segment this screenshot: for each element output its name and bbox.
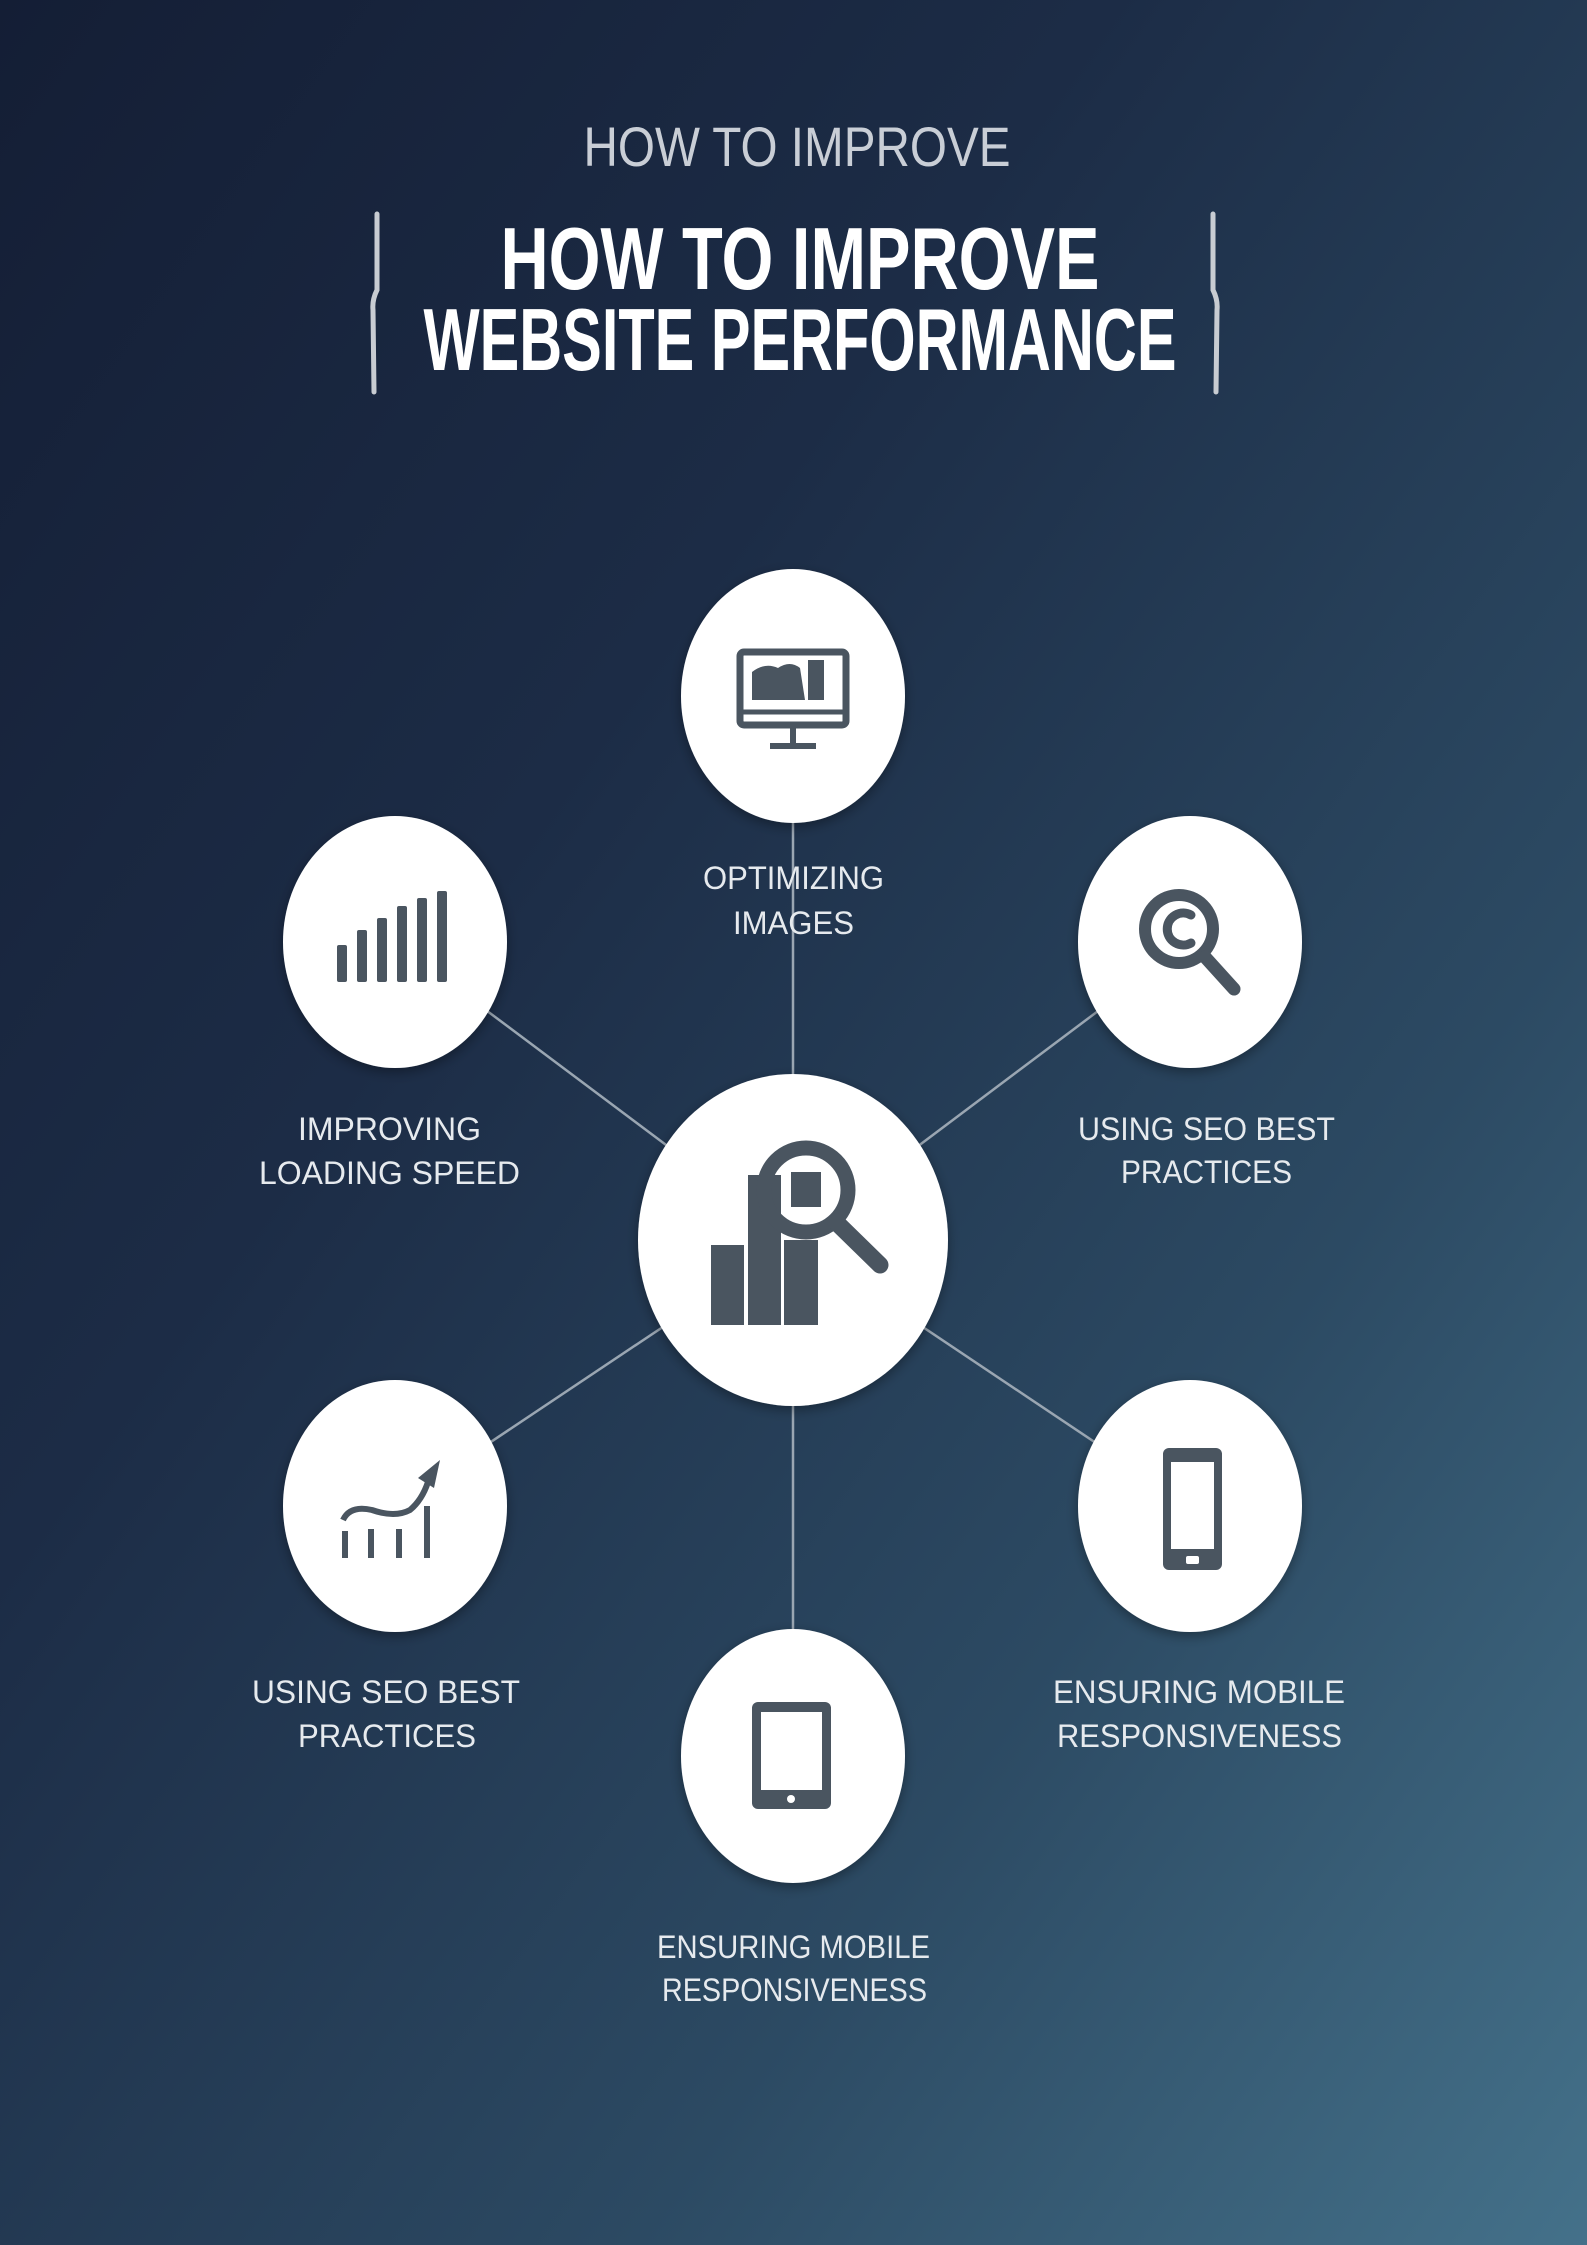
node: left lower trend bbox=[283, 1380, 507, 1632]
icon: tablet bbox=[752, 1702, 831, 1809]
icon: phone bbox=[1163, 1448, 1222, 1570]
label: using seo best practices left bbox=[252, 1674, 520, 1754]
label: improving loading speed: LOADING SPEED bbox=[259, 1155, 520, 1191]
connector lines bbox=[395, 700, 1190, 1756]
node: top optimizing images bbox=[681, 569, 905, 823]
icon: monitor bbox=[740, 652, 846, 749]
label: using seo best practices left: PRACTICES bbox=[298, 1718, 476, 1754]
label: optimizing images: IMAGES bbox=[733, 905, 854, 941]
label: improving loading speed: IMPROVING bbox=[298, 1111, 481, 1147]
label: ensuring mobile responsiveness bottom: RESPONSIVENESS bbox=[662, 1972, 927, 2008]
title: HOW TO IMPROVE bbox=[500, 209, 1100, 308]
label: using seo best practices right: USING SEO BEST bbox=[1078, 1111, 1335, 1147]
label: using seo best practices right: PRACTICES bbox=[1121, 1154, 1292, 1190]
icon: chart with magnifier bbox=[711, 1148, 880, 1325]
title: WEBSITE PERFORMANCE bbox=[424, 290, 1176, 389]
node: right lower phone bbox=[1078, 1380, 1302, 1632]
label: ensuring mobile responsiveness right: ENSURING MOBILE bbox=[1053, 1674, 1345, 1710]
node: bottom tablet bbox=[681, 1629, 905, 1883]
label: ensuring mobile responsiveness bottom bbox=[657, 1929, 930, 2008]
node: center bbox=[638, 1074, 948, 1406]
label: using seo best practices left: USING SEO BEST bbox=[252, 1674, 520, 1710]
title bbox=[424, 209, 1176, 389]
node: left upper loading speed bbox=[283, 816, 507, 1068]
label: ensuring mobile responsiveness right bbox=[1053, 1674, 1345, 1754]
label: using seo best practices right bbox=[1078, 1111, 1335, 1190]
title brackets bbox=[373, 214, 1217, 392]
label: ensuring mobile responsiveness bottom: ENSURING MOBILE bbox=[657, 1929, 930, 1965]
label: ensuring mobile responsiveness right: RESPONSIVENESS bbox=[1057, 1718, 1342, 1754]
label: optimizing images bbox=[703, 860, 884, 941]
subtitle: HOW TO IMPROVE bbox=[584, 115, 1010, 178]
icon: bars bbox=[337, 891, 447, 982]
label: optimizing images: OPTIMIZING bbox=[703, 860, 884, 896]
label: improving loading speed bbox=[259, 1111, 520, 1191]
icon: magnifier copyright bbox=[1145, 895, 1234, 989]
icon: trend chart bbox=[342, 1460, 440, 1558]
node: right upper seo bbox=[1078, 816, 1302, 1068]
